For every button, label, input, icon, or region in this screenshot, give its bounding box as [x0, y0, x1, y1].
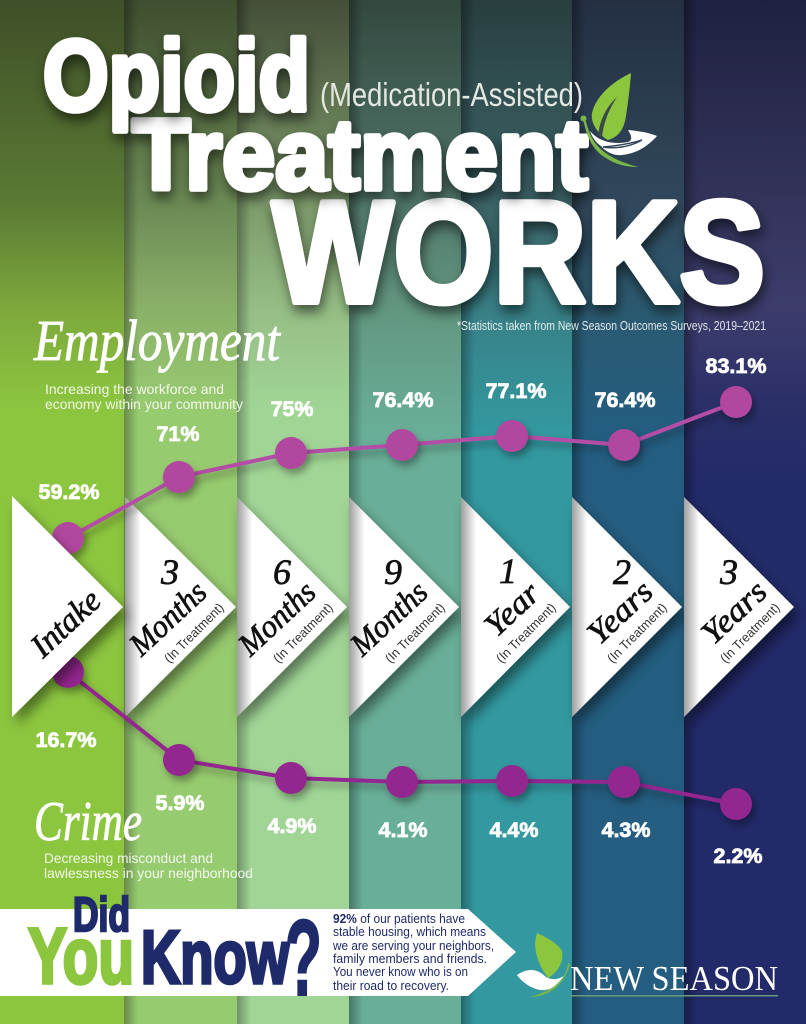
heading: Did You Know?: You — [28, 911, 134, 1000]
employment description — [45, 381, 243, 412]
label: 9 months: Months — [342, 573, 434, 663]
title word: Opioid: Opioid — [43, 20, 310, 132]
label: 2 years: 2 — [613, 552, 631, 592]
label: 3 months: Months — [121, 573, 213, 663]
employment description: economy within your community — [45, 396, 243, 412]
timeline triangles 3 months to 3 years — [125, 497, 794, 717]
crime description: lawlessness in your neighborhood — [44, 865, 253, 881]
did you know paragraph: their road to recovery. — [333, 978, 449, 993]
label: 2 years — [579, 552, 670, 666]
title word: Treatment: Treatment — [132, 99, 588, 211]
did you know banner — [0, 889, 516, 1018]
crime description — [44, 850, 253, 881]
label: 9 months: 9 — [384, 552, 402, 592]
did you know paragraph: You never know who is on — [333, 964, 468, 979]
crime percentages: 5.9% — [155, 791, 205, 815]
did you know paragraph: we are serving your neighbors, — [332, 938, 494, 953]
crime percentages: 4.9% — [267, 814, 317, 838]
heading: Did You Know?: Know — [141, 915, 289, 999]
crime percentages — [36, 728, 763, 868]
new season logo: NEW SEASON — [570, 959, 778, 998]
heading: Did You Know? — [28, 889, 322, 1018]
timeline labels — [23, 551, 783, 666]
crime percentages: 16.7% — [36, 728, 96, 752]
crime percentages: 4.3% — [601, 818, 651, 842]
label: 3 months: 3 — [160, 552, 179, 592]
label: 1 year: Year — [477, 574, 547, 643]
label: 3 months: (In Treatment) — [161, 600, 227, 666]
heading: Employment — [33, 308, 282, 412]
line chart: employment — [52, 386, 752, 554]
heading: Did You Know?: ? — [285, 897, 322, 1018]
crime description: Decreasing misconduct and — [44, 850, 213, 866]
label: 2 years: Years — [579, 573, 660, 651]
employment percentages: 71% — [156, 422, 200, 446]
employment percentages: 83.1% — [706, 354, 766, 378]
employment percentages: 76.4% — [595, 388, 655, 412]
employment percentages: 77.1% — [486, 379, 546, 403]
heading: Crime — [34, 791, 253, 881]
crime percentages: 4.1% — [378, 818, 428, 842]
employment description: Increasing the workforce and — [45, 381, 224, 397]
title — [43, 20, 765, 333]
crime percentages: 2.2% — [713, 844, 763, 868]
subtitle: Medication-Assisted: (Medication-Assisted) — [320, 76, 583, 113]
employment percentages: 59.2% — [39, 480, 99, 504]
icon: leaf logo — [580, 73, 657, 167]
crime percentages: 4.4% — [489, 818, 539, 842]
did you know paragraph: family members and friends. — [333, 951, 487, 966]
timeline labels: Intake — [23, 583, 108, 665]
label: 3 years — [693, 552, 783, 666]
did you know paragraph: stable housing, which means — [333, 924, 486, 939]
employment percentages — [39, 354, 766, 504]
label: 6 months: Months — [230, 573, 322, 663]
label: 9 months: (In Treatment) — [382, 600, 448, 666]
employment percentages: 76.4% — [373, 388, 433, 412]
heading: Crime: Crime — [34, 791, 142, 853]
intake triangle — [12, 496, 123, 717]
label: 3 years: Years — [693, 573, 774, 651]
did you know paragraph — [332, 911, 494, 993]
did you know paragraph: 92% of our patients have — [333, 911, 465, 926]
heading: Employment: Employment — [33, 308, 282, 373]
label: 1 year: (In Treatment) — [493, 600, 559, 666]
employment percentages: 75% — [270, 397, 314, 421]
label: 6 months: (In Treatment) — [270, 600, 336, 666]
icon: logo leaf — [517, 933, 570, 997]
label: 2 years: (In Treatment) — [604, 600, 670, 666]
line chart: crime — [52, 656, 752, 820]
label: 3 years: (In Treatment) — [717, 600, 783, 666]
heading: Did You Know?: Did — [73, 889, 130, 942]
label: 6 months: 6 — [273, 552, 291, 592]
label: 3 years: 3 — [719, 552, 738, 592]
label: 1 year: 1 — [499, 551, 517, 591]
label: 1 year — [477, 551, 559, 666]
new season logo — [517, 933, 778, 998]
